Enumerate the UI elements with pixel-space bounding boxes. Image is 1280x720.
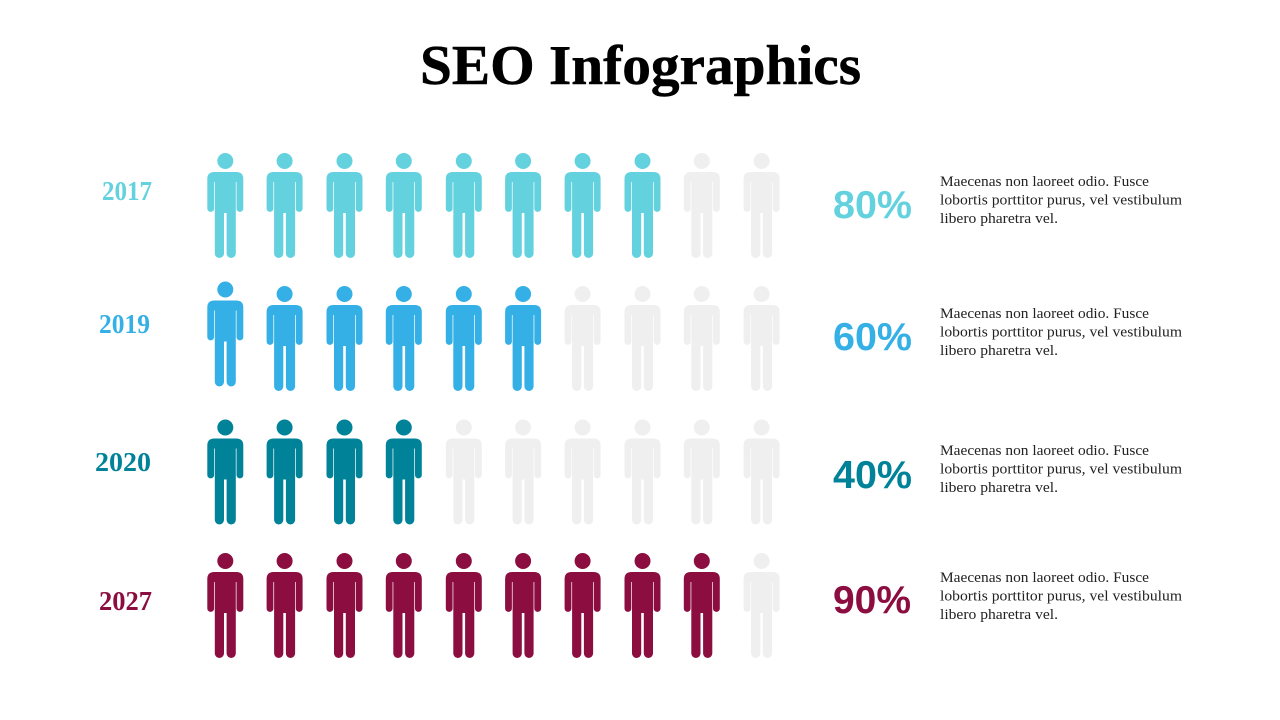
description: Maecenas non laoreet odio. Fusce xyxy=(940,306,1149,322)
description: lobortis porttitor purus, vel vestibulum xyxy=(940,324,1183,340)
description: libero pharetra vel. xyxy=(940,211,1058,227)
description: lobortis porttitor purus, vel vestibulum xyxy=(940,192,1183,208)
pictogram: 9 of 10 people xyxy=(207,553,780,658)
pictogram: 8 of 10 people xyxy=(207,153,780,258)
description: Maecenas non laoreet odio. Fusce xyxy=(940,443,1149,459)
title: SEO Infographics xyxy=(420,35,861,97)
year label 2027: 2027 xyxy=(99,586,152,616)
year label 2019: 2019 xyxy=(99,309,150,339)
description: libero pharetra vel. xyxy=(940,480,1058,496)
percentage 80%: 80% xyxy=(833,184,912,227)
row: 2019 xyxy=(99,282,1183,391)
row: 2017 xyxy=(102,153,1183,258)
description: Maecenas non laoreet odio. Fusce xyxy=(940,174,1149,190)
percentage 60%: 60% xyxy=(833,316,912,359)
description: lobortis porttitor purus, vel vestibulum xyxy=(940,588,1183,604)
year label 2020: 2020 xyxy=(95,447,151,477)
row: 2020 xyxy=(95,420,1183,524)
percentage 90%: 90% xyxy=(833,579,911,622)
description: libero pharetra vel. xyxy=(940,607,1058,623)
pictogram: 6 of 10 people xyxy=(207,282,780,391)
description: libero pharetra vel. xyxy=(940,343,1058,359)
row: 2027 xyxy=(99,553,1183,658)
pictogram: 4 of 10 people xyxy=(207,420,780,524)
percentage 40%: 40% xyxy=(833,454,912,497)
year label 2017: 2017 xyxy=(102,176,152,206)
description: lobortis porttitor purus, vel vestibulum xyxy=(940,462,1183,478)
description: Maecenas non laoreet odio. Fusce xyxy=(940,570,1149,586)
